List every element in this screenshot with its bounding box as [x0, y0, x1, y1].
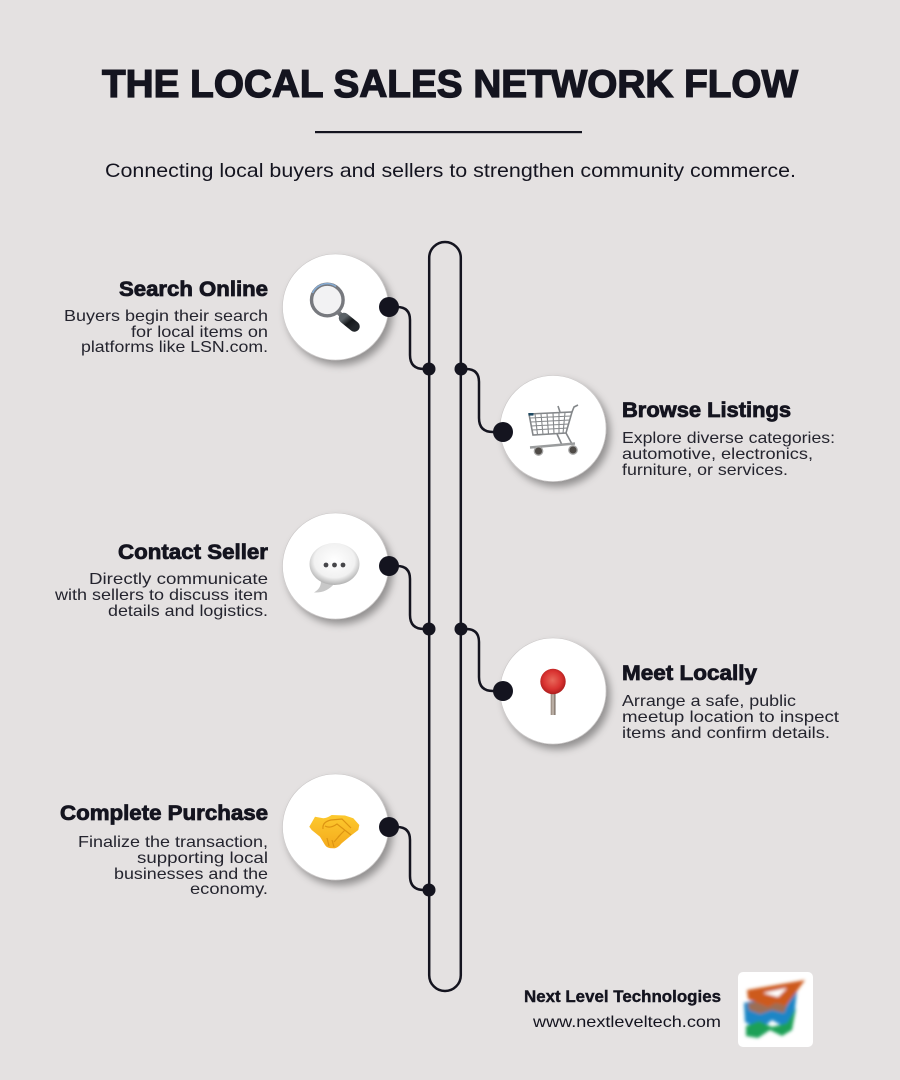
step 5 text: complete purchase: supporting local — [137, 850, 268, 867]
logo — [738, 972, 813, 1047]
step 4 text: meet locally: Meet Locally — [622, 662, 757, 685]
step 2 text: browse listings: Browse Listings — [622, 399, 791, 422]
subtitle: Connecting local buyers and sellers to strengthen community commerce. — [105, 160, 796, 182]
icon: shopping cart — [528, 405, 578, 455]
step 1 text: search online: Buyers begin their search — [64, 308, 268, 325]
connectors — [389, 307, 503, 890]
step 2 text: browse listings — [622, 399, 835, 479]
step 3 text: contact seller: Contact Seller — [118, 541, 268, 564]
central track — [429, 242, 461, 991]
step 5 text: complete purchase: Complete Purchase — [60, 802, 268, 825]
step 3 text: contact seller: Directly communicate — [89, 571, 268, 588]
icon: magnifying glass — [312, 284, 354, 326]
step 2 text: browse listings: furniture, or services. — [622, 462, 788, 479]
step 2 text: browse listings: Explore diverse categories: — [622, 430, 835, 447]
step 5 text: complete purchase: Finalize the transaction, — [78, 834, 268, 851]
step 5 text: complete purchase: businesses and the — [114, 866, 268, 883]
step 3 text: contact seller: details and logistics. — [108, 603, 268, 620]
icon: handshake — [309, 815, 359, 848]
connector nodes — [379, 297, 513, 896]
step 4 text: meet locally: Arrange a safe, public — [622, 693, 796, 710]
footer company name and url: Next Level Technologies — [524, 988, 721, 1006]
step 3 text: contact seller: with sellers to discuss item — [54, 587, 268, 604]
icon circles — [282, 254, 606, 880]
step 2 text: browse listings: automotive, electronics, — [622, 446, 813, 463]
icon: speech bubble — [310, 543, 360, 593]
step 1 text: search online — [64, 278, 268, 356]
step 4 text: meet locally: items and confirm details. — [622, 725, 830, 742]
footer company name and url — [524, 988, 721, 1031]
title: THE LOCAL SALES NETWORK FLOW — [102, 63, 799, 106]
footer company name and url: www.nextleveltech.com — [532, 1014, 721, 1031]
icon: map pin — [540, 669, 566, 715]
step 3 text: contact seller — [54, 541, 268, 620]
step 1 text: search online: Search Online — [119, 278, 268, 301]
step 4 text: meet locally: meetup location to inspect — [622, 709, 840, 726]
step 1 text: search online: platforms like LSN.com. — [81, 339, 268, 356]
step 1 text: search online: for local items on — [131, 324, 268, 341]
step 5 text: complete purchase: economy. — [190, 881, 268, 898]
step 5 text: complete purchase — [60, 802, 268, 898]
step 4 text: meet locally — [622, 662, 840, 742]
